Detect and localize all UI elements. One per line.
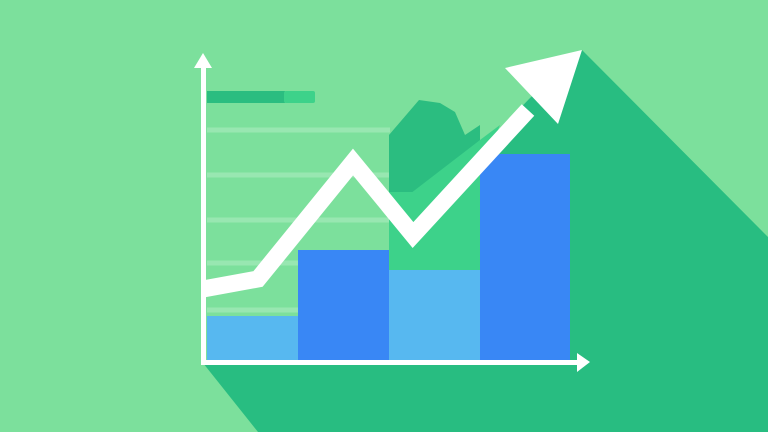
bar 1: [207, 316, 298, 362]
legend bar: [207, 91, 315, 103]
grid lines: [207, 130, 390, 310]
long shadow: [203, 50, 768, 432]
trend arrow: [203, 50, 582, 289]
bar 3 stacked: [389, 100, 500, 362]
bar 2: [298, 250, 389, 362]
bar 4: [480, 154, 570, 362]
axes: [194, 53, 590, 372]
